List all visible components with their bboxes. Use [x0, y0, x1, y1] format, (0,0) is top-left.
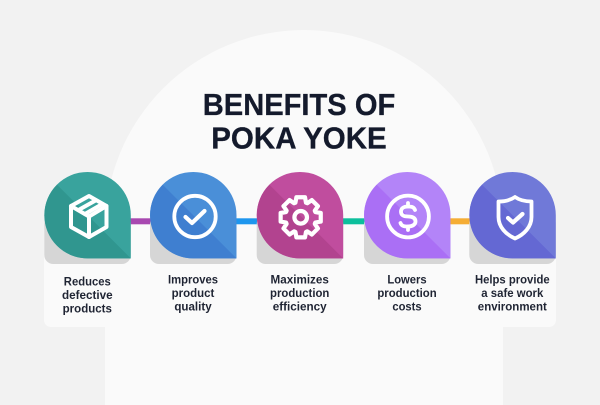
pin: [469, 172, 556, 258]
pin: [44, 172, 131, 258]
icon: gear: [281, 197, 321, 237]
label: Maximizes: [271, 273, 329, 287]
label: [270, 273, 329, 313]
pin shadow: [44, 215, 131, 264]
pin: [364, 172, 450, 258]
label: environment: [478, 299, 547, 313]
pin: [257, 172, 343, 258]
connector: blue: [236, 218, 257, 224]
connector: green: [342, 218, 365, 224]
label: [62, 275, 113, 316]
connector: purple: [130, 218, 151, 224]
step 1: reduces defective products: [44, 172, 131, 316]
pin shadow: [150, 215, 236, 264]
icon: box: [71, 196, 106, 237]
icon: shield with check: [498, 197, 532, 238]
label: product: [172, 286, 214, 300]
pin: [150, 172, 236, 258]
label: production: [270, 286, 329, 300]
label: quality: [174, 299, 212, 313]
icon: check circle: [174, 196, 216, 237]
label card panel: [44, 225, 556, 327]
label: [475, 273, 550, 313]
label: defective: [62, 288, 113, 302]
step 2: improves product quality: [150, 172, 236, 313]
icon: dollar coin: [387, 196, 429, 237]
label: efficiency: [273, 299, 327, 313]
label: production: [377, 286, 437, 300]
label: Reduces: [64, 275, 111, 289]
pin shadow: [469, 215, 556, 264]
label: Helps provide: [475, 273, 550, 287]
label: Improves: [168, 273, 218, 287]
title: [203, 87, 395, 156]
pin shadow: [257, 215, 343, 264]
connector: orange: [450, 218, 470, 224]
title: POKA YOKE: [211, 121, 387, 156]
label: costs: [392, 299, 422, 313]
label: products: [63, 302, 112, 316]
pin shadow: [364, 215, 450, 264]
step 4: lowers production costs: [364, 172, 450, 313]
background arch panel: [105, 30, 503, 405]
label: Lowers: [387, 273, 427, 287]
step 3: maximizes production efficiency: [257, 172, 343, 313]
label: a safe work: [481, 286, 544, 300]
label: [168, 273, 218, 313]
step 5: helps provide a safe work environment: [469, 172, 556, 313]
label: [377, 273, 437, 313]
title: BENEFITS OF: [203, 87, 395, 122]
